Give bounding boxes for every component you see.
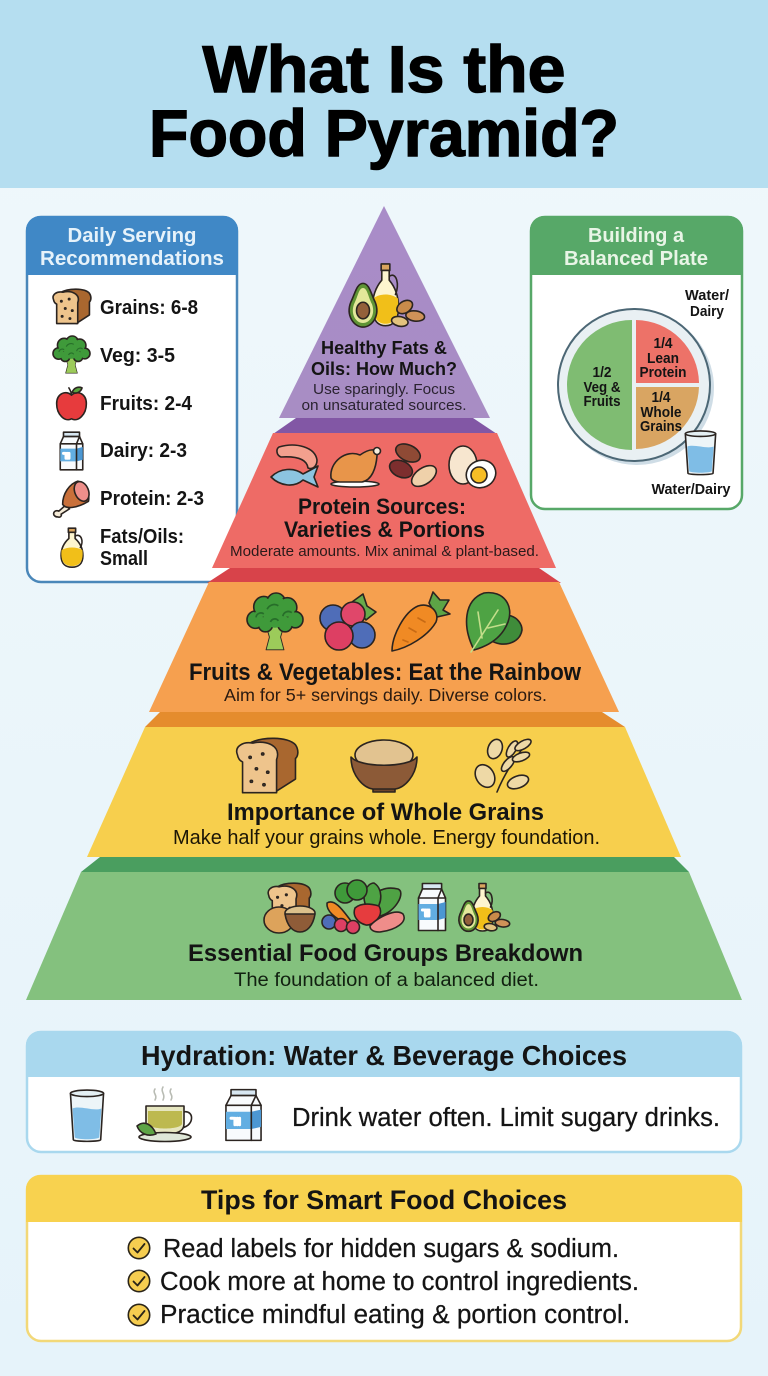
icon: oats and wheat [471, 737, 533, 792]
tier text: Protein Sources: [298, 494, 466, 519]
tier text: Aim for 5+ servings daily. Diverse colors. [224, 685, 547, 705]
icon: water glass on plate [685, 431, 716, 475]
icon: food groups cluster [264, 880, 510, 934]
label: grains: Grains: 6-8 [100, 297, 198, 319]
label: water dairy top: Dairy [690, 303, 725, 320]
icon: water glass [70, 1090, 104, 1141]
icon: milk carton [60, 432, 83, 470]
tier text: Fruits & Vegetables: Eat the Rainbow [189, 659, 581, 686]
tier text [302, 337, 466, 414]
segment: quarter whole grains [636, 387, 699, 449]
label: fats and oils: Fats/Oils: [100, 526, 184, 548]
icon: nuts [390, 298, 426, 328]
segment: half vegetables and fruits: Fruits [584, 393, 620, 410]
icon: mixed berries [320, 594, 376, 650]
segment: quarter lean protein [636, 320, 699, 383]
icon: oil bottle [61, 528, 83, 567]
panel heading: daily serving [40, 224, 224, 270]
tier text [230, 494, 539, 560]
icon: broccoli [53, 336, 90, 373]
icon: vegetables and protein [322, 880, 404, 934]
label: fruits: Fruits: 2-4 [100, 393, 193, 415]
tier: fruits and vegetables [145, 582, 625, 727]
icon: milk carton [418, 884, 446, 930]
icon: breads and grains [264, 883, 315, 933]
segment: half vegetables and fruits [567, 320, 632, 450]
tip 1: Read labels for hidden sugars & sodium. [163, 1235, 619, 1263]
segment: quarter lean protein: Lean [647, 350, 679, 367]
heading: tips: Tips for Smart Food Choices [201, 1185, 567, 1215]
label: water dairy top: Water/ [685, 287, 730, 304]
title banner: Food Pyramid? [149, 96, 619, 170]
panel: building a balanced plate [530, 216, 743, 509]
hydration message: Drink water often. Limit sugary drinks. [292, 1104, 720, 1132]
icon: fish [271, 466, 318, 487]
segment: quarter whole grains: Whole [640, 404, 682, 421]
tier text: on unsaturated sources. [302, 397, 466, 414]
tier text: Use sparingly. Focus [313, 381, 455, 398]
plate chart [558, 309, 714, 465]
tier text: Varieties & Portions [284, 517, 485, 542]
icon: check 3 [128, 1304, 150, 1326]
panel heading: daily serving: Recommendations [40, 247, 224, 270]
tier: protein sources [207, 433, 561, 583]
title banner: What Is the [202, 32, 566, 106]
tier text [173, 799, 600, 849]
label: water dairy bottom: Water/Dairy [652, 481, 731, 498]
panel heading: balanced plate [564, 224, 708, 270]
icon: grain bowl [351, 740, 417, 792]
tier text: Oils: How Much? [311, 358, 457, 379]
label: protein: Protein: 2-3 [100, 488, 204, 510]
tier text: Moderate amounts. Mix animal & plant-based. [230, 543, 539, 560]
icon: milk carton [226, 1090, 261, 1140]
icon: spinach [467, 593, 522, 652]
segment: quarter lean protein: Protein [640, 364, 686, 381]
panel: daily serving recommendations [26, 216, 238, 582]
icon: apple [57, 387, 86, 420]
tier text: Make half your grains whole. Energy foundation. [173, 827, 600, 849]
title banner [0, 0, 768, 188]
label: fats and oils [100, 526, 184, 570]
tier text [189, 659, 581, 705]
panel heading: daily serving: Daily Serving [68, 224, 196, 247]
label: dairy: Dairy: 2-3 [100, 440, 187, 462]
icon: carrot [392, 592, 450, 651]
tier: healthy fats and oils [273, 206, 497, 434]
icon: avocado [349, 283, 377, 327]
label: veg: Veg: 3-5 [100, 345, 175, 367]
icon: green tea [137, 1087, 192, 1142]
panel heading: balanced plate: Building a [588, 224, 685, 247]
icon: shrimp [277, 445, 317, 469]
segment: quarter lean protein: 1/4 [654, 335, 673, 352]
segment: quarter whole grains: 1/4 [652, 389, 671, 406]
tip 2: Cook more at home to control ingredients. [160, 1268, 639, 1296]
label: fats and oils: Small [100, 548, 148, 570]
icon: loaf of bread [237, 738, 298, 793]
icon: oil bottle [372, 264, 399, 326]
tip 3: Practice mindful eating & portion control. [160, 1301, 630, 1329]
panel heading: balanced plate: Balanced Plate [564, 247, 708, 270]
tier text: Importance of Whole Grains [227, 799, 544, 826]
tier text: Essential Food Groups Breakdown [188, 940, 583, 967]
heading: hydration: Hydration: Water & Beverage Choices [141, 1040, 627, 1071]
icon: drumstick [54, 479, 92, 517]
tier text: The foundation of a balanced diet. [234, 970, 539, 991]
icon: check 1 [128, 1237, 150, 1259]
icon: roast chicken [331, 448, 380, 487]
segment: quarter whole grains: Grains [640, 418, 682, 435]
segment: half vegetables and fruits: Veg & [584, 379, 621, 396]
label: water dairy top [685, 287, 730, 320]
icon: beans [387, 440, 440, 491]
segment: half vegetables and fruits: 1/2 [592, 364, 612, 381]
tier: essential food groups [26, 872, 742, 1000]
icon: bread [53, 289, 91, 324]
tier: whole grains [81, 727, 689, 872]
panel: tips for smart food choices [26, 1175, 742, 1341]
icon: avocado, oil and nuts [459, 884, 510, 932]
icon: eggs [449, 446, 500, 493]
pyramid [26, 206, 742, 1000]
icon: check 2 [128, 1270, 150, 1292]
icon: broccoli [247, 593, 303, 650]
panel: hydration [26, 1031, 742, 1152]
tier text [188, 940, 583, 991]
tier text: Healthy Fats & [321, 337, 447, 358]
